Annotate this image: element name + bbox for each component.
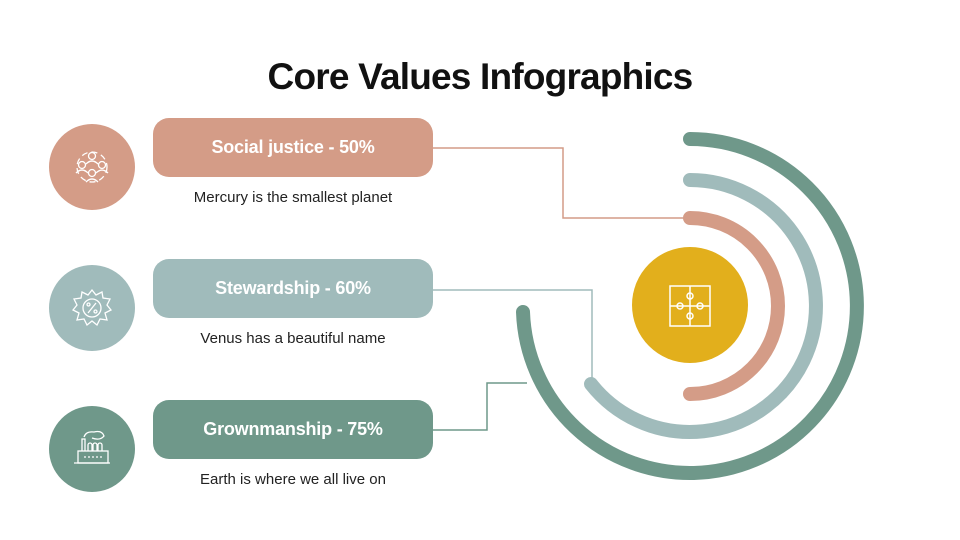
icon circle: people — [49, 124, 135, 210]
pill: social justice — [153, 118, 433, 177]
pill: stewardship: Stewardship - 60% — [215, 278, 371, 298]
pill: social justice: Social justice - 50% — [211, 137, 375, 157]
pill: grownmanship — [153, 400, 433, 459]
text: stewardship: Venus has a beautiful name — [200, 330, 386, 347]
connector: social justice — [433, 148, 690, 218]
icon circle: gear percent — [49, 265, 135, 351]
center circle with puzzle icon — [632, 247, 748, 363]
arc: salmon 50% — [690, 218, 778, 394]
connector: stewardship — [433, 290, 592, 382]
connector: grownmanship — [433, 383, 527, 430]
icon circle: factory — [49, 406, 135, 492]
text: grownmanship: Earth is where we all live on — [200, 471, 386, 488]
arc: light blue 60% — [591, 180, 816, 432]
pill: grownmanship: Grownmanship - 75% — [203, 419, 383, 439]
pill: stewardship — [153, 259, 433, 318]
arc: green 75% — [523, 139, 857, 473]
title: Core Values Infographics — [268, 56, 692, 97]
text: social justice: Mercury is the smallest planet — [194, 189, 392, 206]
